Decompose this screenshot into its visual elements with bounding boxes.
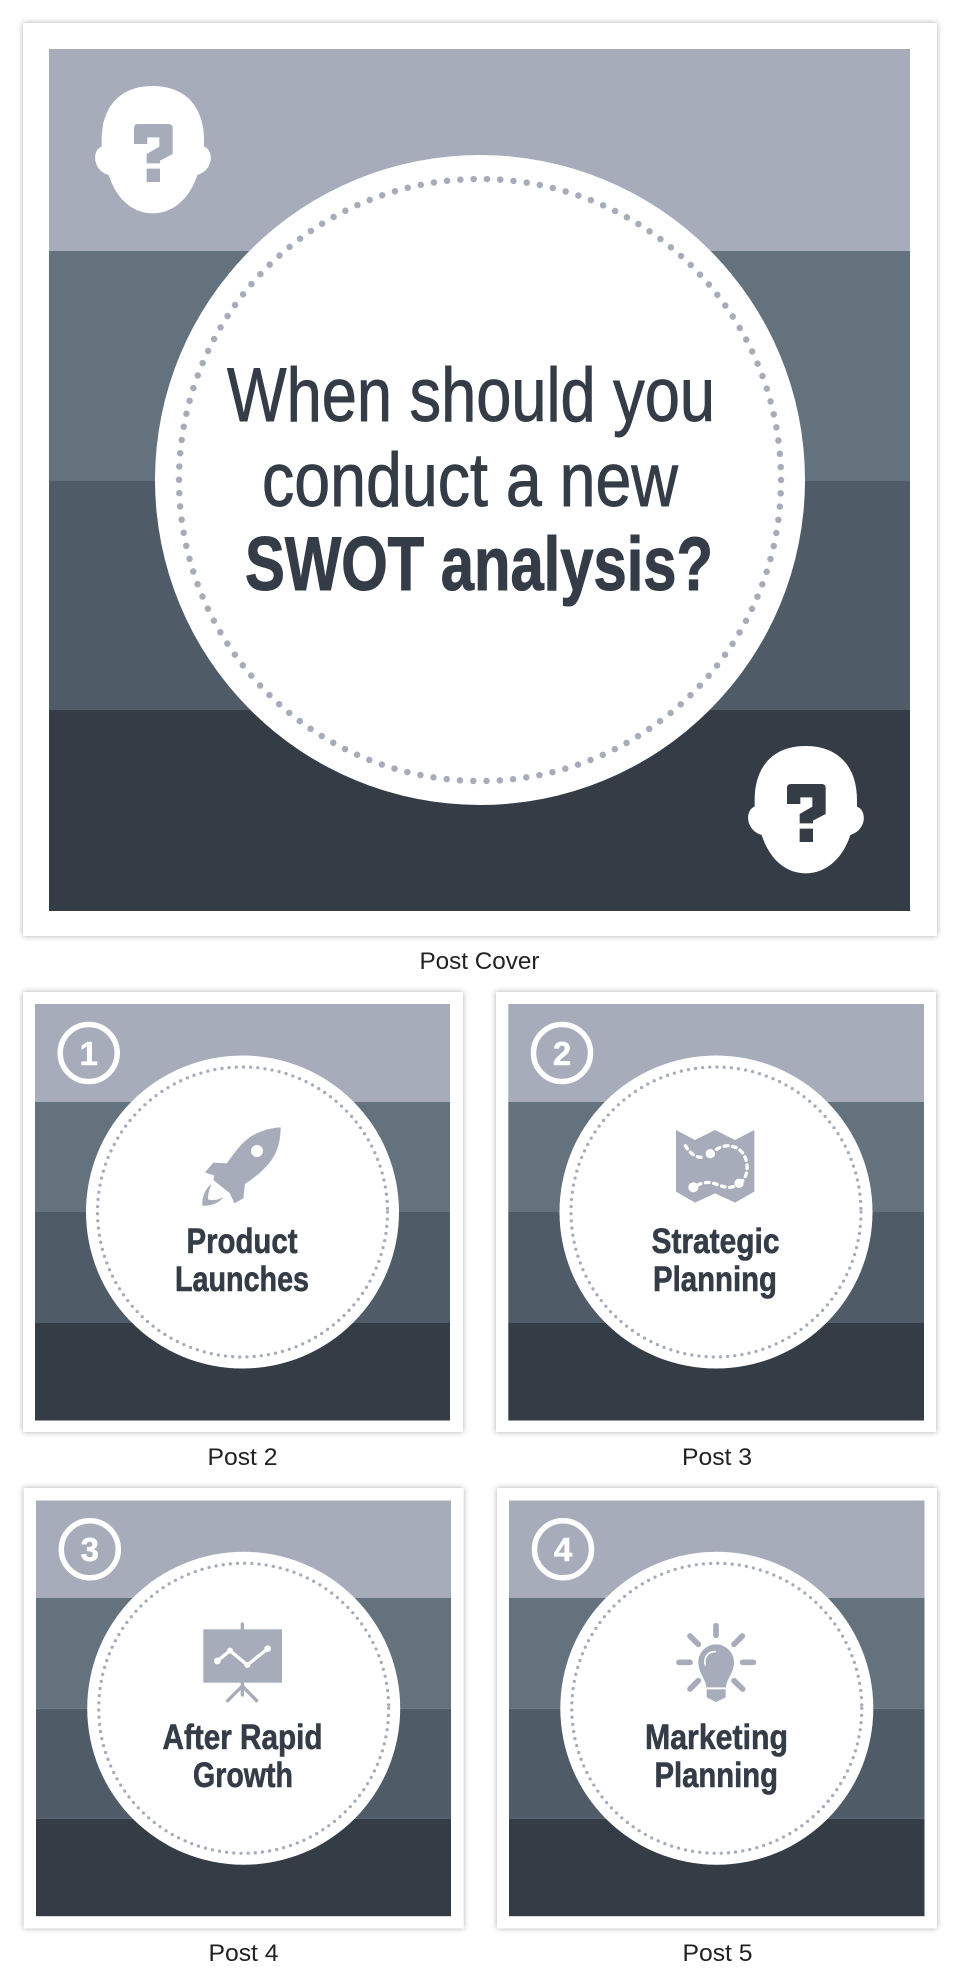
cover heading: When should you xyxy=(227,353,715,438)
post 4 white circle xyxy=(87,1552,400,1865)
post 5 number badge xyxy=(534,1521,592,1578)
post 3 label: Strategic xyxy=(652,1222,780,1261)
panel: post 5 xyxy=(497,1488,937,1928)
caption: post 4: Post 4 xyxy=(208,1940,278,1967)
post 3 number badge: 2 xyxy=(553,1035,571,1072)
cover heading: SWOT analysis? xyxy=(245,522,713,607)
caption: post cover: Post Cover xyxy=(420,948,540,975)
post 5 label: Marketing xyxy=(645,1718,788,1757)
cover striped background xyxy=(49,49,910,911)
post 3 label: Planning xyxy=(653,1260,777,1299)
icon: head with question mark, bottom right xyxy=(748,746,864,873)
post 3 white circle xyxy=(560,1056,872,1368)
post 3 card xyxy=(496,992,936,1432)
caption: post 3: Post 3 xyxy=(682,1444,752,1471)
post 5 card xyxy=(497,1488,937,1928)
post 4 card xyxy=(24,1488,464,1928)
panel: post 2 xyxy=(23,992,463,1432)
post 3 striped background xyxy=(508,1004,924,1420)
post 5 number badge: 4 xyxy=(554,1531,573,1568)
icon: head with question mark, top left xyxy=(95,86,211,213)
cover white circle xyxy=(155,155,805,805)
cover heading: conduct a new xyxy=(262,438,679,523)
post 5 label xyxy=(645,1718,788,1795)
icon: light bulb xyxy=(679,1626,753,1702)
panel: post cover xyxy=(23,23,937,936)
post 4 label: Growth xyxy=(193,1756,293,1795)
icon: map with route xyxy=(676,1130,754,1203)
post 2 card xyxy=(23,992,463,1432)
post 3 number badge xyxy=(534,1024,590,1082)
post 2 dotted ring xyxy=(98,1067,388,1357)
panel: post 3 xyxy=(496,992,936,1432)
post 2 striped background xyxy=(35,1004,450,1420)
post 5 label: Planning xyxy=(654,1756,778,1795)
post 2 white circle xyxy=(86,1056,399,1368)
post 3 dotted ring xyxy=(571,1067,861,1357)
post 2 number badge: 1 xyxy=(80,1035,98,1072)
cover card xyxy=(23,23,937,936)
post 4 striped background xyxy=(36,1500,451,1916)
post 4 number badge xyxy=(61,1521,118,1578)
caption: post 2: Post 2 xyxy=(208,1444,278,1471)
post 2 label: Launches xyxy=(175,1260,309,1299)
post 4 number badge: 3 xyxy=(81,1531,99,1568)
cover heading xyxy=(227,353,715,607)
post 2 label xyxy=(175,1222,309,1299)
post 4 label xyxy=(162,1718,322,1795)
post 5 dotted ring xyxy=(572,1563,862,1853)
post 4 label: After Rapid xyxy=(162,1718,322,1757)
icon: rocket xyxy=(202,1127,281,1206)
post 2 label: Product xyxy=(186,1222,298,1261)
post 5 striped background xyxy=(509,1500,924,1916)
cover dotted ring xyxy=(179,179,781,781)
post 2 number badge xyxy=(60,1024,117,1082)
post 4 dotted ring xyxy=(99,1563,389,1853)
icon: presentation board with chart xyxy=(203,1624,282,1701)
panel: post 4 xyxy=(24,1488,464,1928)
caption: post 5: Post 5 xyxy=(682,1940,752,1967)
post 3 label xyxy=(652,1222,780,1299)
post 5 white circle xyxy=(560,1552,873,1865)
